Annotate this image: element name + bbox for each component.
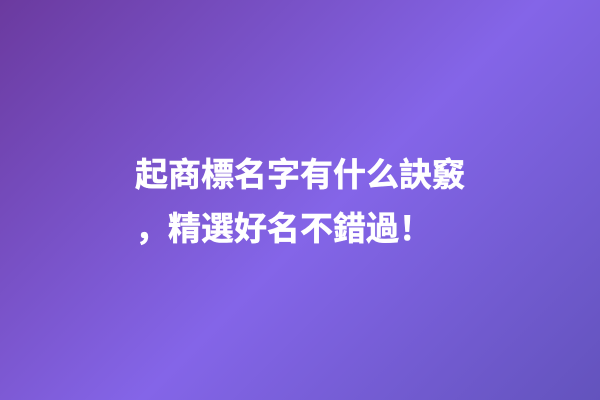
title line 2: ，精選好名不錯過！	[135, 210, 432, 247]
title	[135, 156, 465, 247]
title line 1: 起商標名字有什么訣竅	[135, 156, 465, 193]
